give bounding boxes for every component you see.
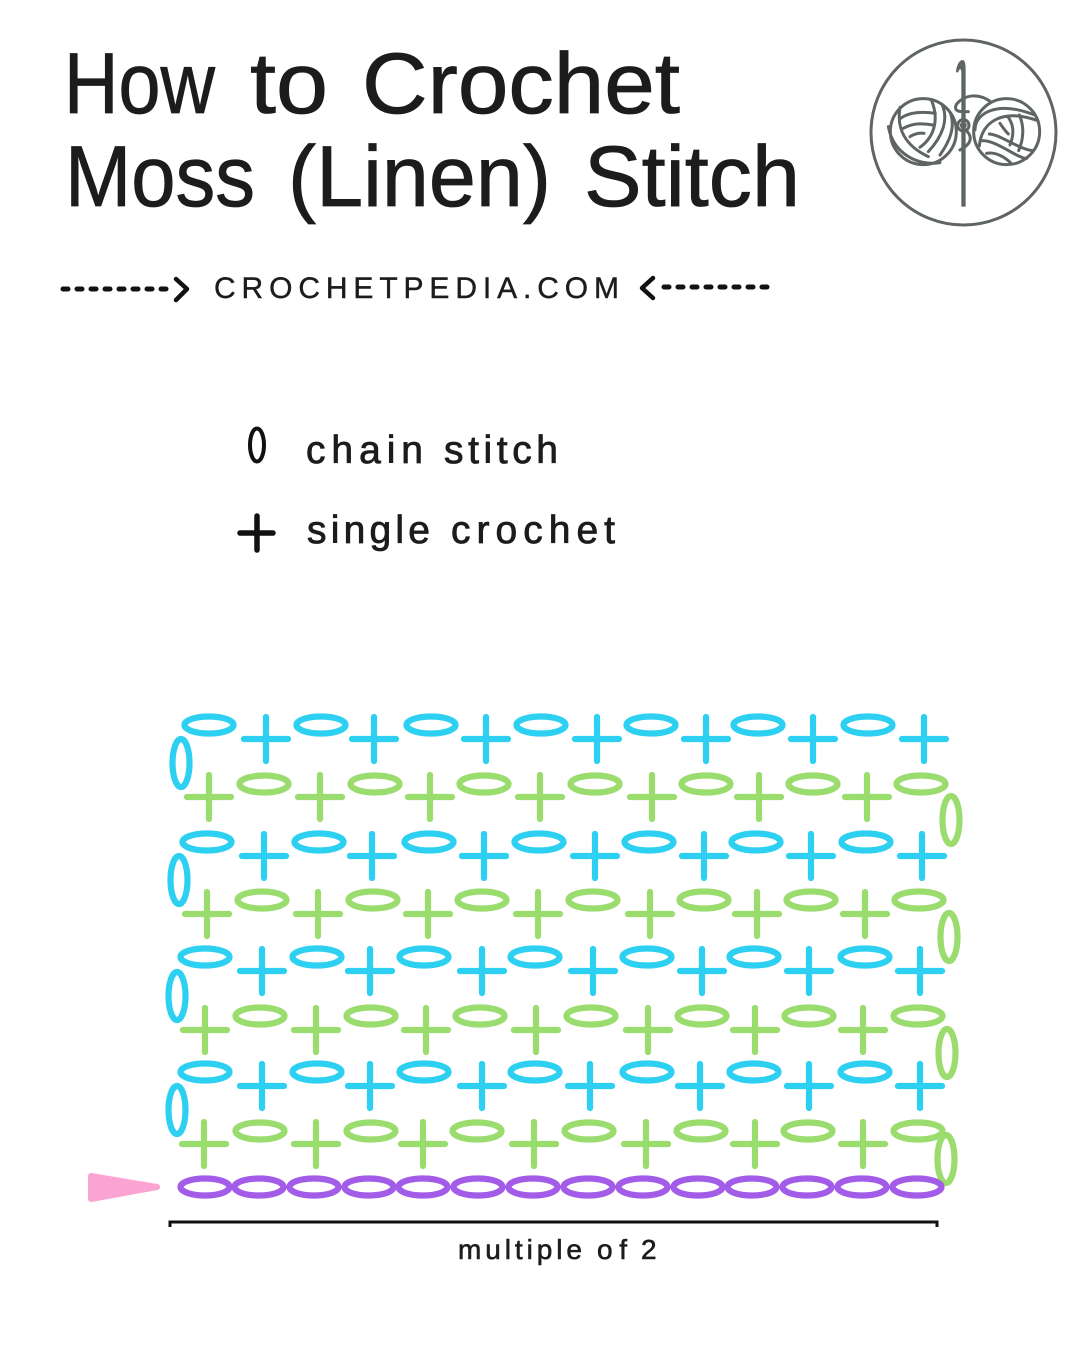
icon: single crochet symbol	[240, 516, 273, 550]
website name: CROCHETPEDIA.COM	[214, 272, 619, 305]
label: chain stitch: chain	[306, 429, 423, 472]
start marker triangle	[91, 1176, 157, 1199]
title	[64, 36, 800, 225]
title: Crochet	[362, 36, 680, 132]
arrow: left dotted arrow	[63, 279, 187, 300]
icon: yarn and hook logo	[871, 40, 1056, 225]
title: (Linen)	[288, 129, 551, 225]
label: multiple of 2	[458, 1234, 657, 1265]
icon: chain stitch symbol	[250, 428, 264, 462]
title: to	[250, 36, 328, 132]
title: Stitch	[584, 129, 800, 225]
row 1 green	[182, 1122, 954, 1183]
width bracket	[170, 1222, 937, 1227]
label: single crochet: crochet	[451, 509, 615, 552]
row 5 green	[185, 892, 958, 961]
label: multiple of 2: multiple	[458, 1234, 582, 1265]
website line with arrows	[63, 272, 767, 305]
legend	[240, 428, 615, 552]
label: chain stitch	[306, 429, 558, 472]
foundation chain purple	[180, 1178, 942, 1196]
label: single crochet	[307, 509, 615, 552]
row 3 green	[183, 1008, 956, 1077]
title: Moss	[65, 129, 255, 225]
row 2 blue	[168, 1064, 942, 1134]
label: chain stitch: stitch	[444, 429, 558, 472]
arrow: right dotted arrow	[642, 278, 767, 298]
label: multiple of 2: 2	[641, 1234, 657, 1265]
label: multiple of 2: of	[597, 1234, 627, 1265]
stitch chart	[168, 716, 960, 1196]
row 4 blue	[168, 948, 942, 1020]
row 8 blue	[172, 716, 946, 787]
row 6 blue	[170, 834, 944, 904]
row 7 green	[187, 775, 960, 844]
title: How	[64, 36, 216, 132]
label: single crochet: single	[307, 509, 430, 552]
